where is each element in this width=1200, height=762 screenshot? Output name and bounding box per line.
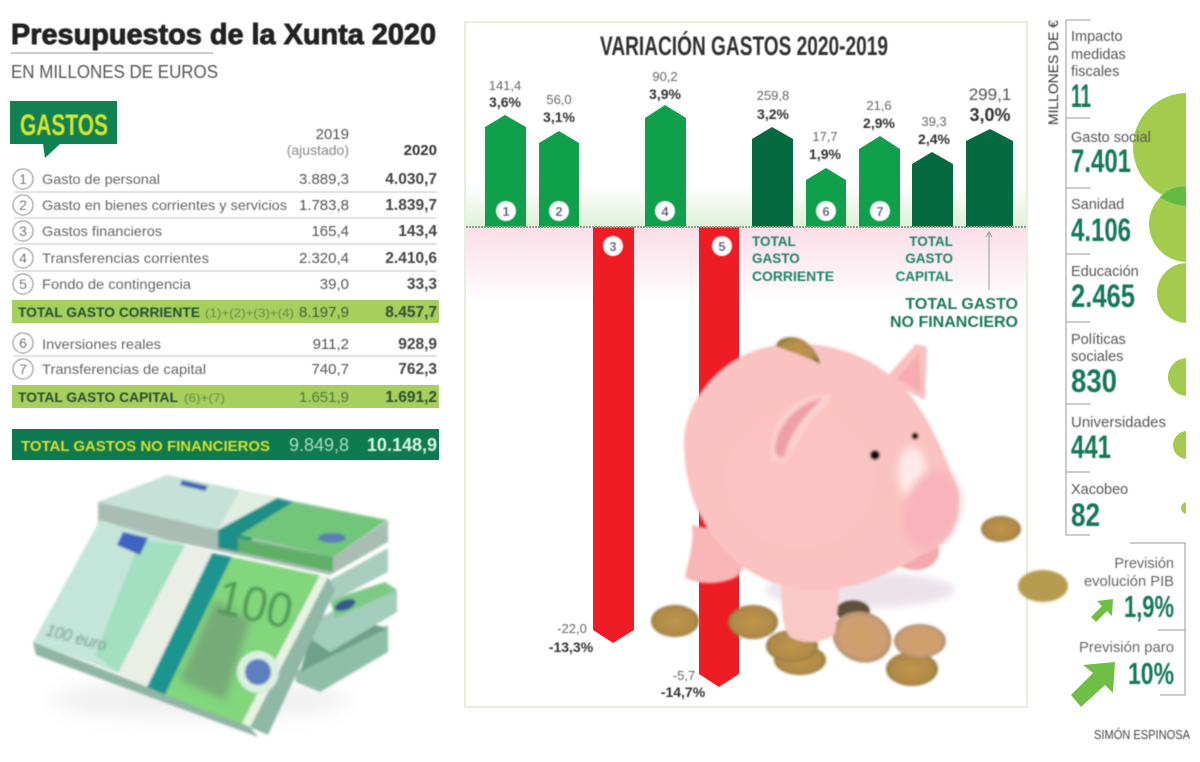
bar number badges: 2	[555, 204, 563, 219]
bar chart: negative variations	[593, 227, 739, 687]
bar value labels: 3,6%	[489, 94, 522, 110]
unemployment forecast	[1079, 640, 1174, 691]
column headers: 2020	[404, 142, 437, 159]
bar number badges	[496, 201, 890, 256]
table rows: current spending	[13, 169, 437, 294]
table rows: capital spending	[13, 333, 437, 379]
label: total gasto no financiero: TOTAL GASTO	[905, 296, 1018, 313]
image: piggy bank with coins	[651, 337, 1068, 686]
table rows: capital spending: 740,7	[311, 361, 349, 378]
unemployment forecast: 10%	[1128, 656, 1174, 691]
GDP forecast: 1,9%	[1124, 589, 1174, 624]
figure values	[1071, 78, 1135, 533]
panel: expenses table	[10, 101, 439, 460]
table rows: current spending: 2	[19, 197, 27, 213]
figure values: 82	[1071, 497, 1100, 533]
table rows: current spending: 2.320,4	[299, 250, 349, 267]
subtitle: EN MILLONES DE EUROS	[11, 62, 218, 82]
table rows: current spending: Transferencias corrientes	[42, 250, 209, 266]
credit: SIMÓN ESPINOSA	[1094, 727, 1191, 742]
bar value labels: -14,7%	[661, 684, 706, 700]
panel: expense variation chart	[465, 22, 1027, 707]
GDP forecast	[1084, 556, 1174, 624]
bar value labels: 17,7	[812, 129, 838, 144]
figure values: 441	[1071, 429, 1111, 465]
total capital spending row: 1.651,9	[299, 389, 349, 406]
GDP forecast: evolución PIB	[1084, 574, 1174, 590]
label: total gasto capital: TOTAL	[909, 234, 953, 249]
table rows: current spending: 3	[19, 223, 27, 239]
coin in slot	[776, 337, 820, 364]
figure values: 4.106	[1071, 212, 1131, 248]
table rows: current spending: Gastos financieros	[42, 223, 162, 239]
figure labels: Impacto	[1071, 29, 1123, 45]
table rows: current spending: Fondo de contingencia	[42, 276, 191, 292]
total current spending row: (1)+(2)+(3)+(4)	[205, 306, 294, 320]
grand total row	[12, 429, 439, 460]
grand total row: TOTAL GASTOS NO FINANCIEROS	[21, 438, 270, 455]
label: total gasto capital: CAPITAL	[896, 269, 953, 284]
figure values: 11	[1071, 78, 1091, 114]
bar value labels: 3,0%	[969, 105, 1011, 125]
figure values: 7.401	[1071, 143, 1131, 179]
chart title: VARIACIÓN GASTOS 2020-2019	[600, 30, 888, 61]
table rows: current spending: 1.839,7	[385, 197, 437, 214]
total current spending row: TOTAL GASTO CORRIENTE	[18, 305, 200, 320]
table rows: current spending: 1	[19, 171, 27, 187]
table rows: current spending: Gasto en bienes corrientes y servicios	[42, 197, 287, 213]
bar number badges: 5	[718, 239, 726, 254]
column headers: 2019	[316, 126, 349, 143]
panel: impact figures in millions	[1048, 20, 1186, 536]
bar value labels: 299,1	[969, 85, 1011, 104]
bar value labels: 90,2	[652, 69, 678, 84]
panel: GDP and unemployment forecast	[1071, 543, 1185, 707]
table rows: current spending: 4	[19, 250, 27, 266]
table rows: current spending: 39,0	[320, 276, 349, 293]
table rows: capital spending: 762,3	[398, 361, 437, 378]
figure values: 830	[1071, 363, 1117, 399]
bar value labels: -5,7	[673, 668, 695, 683]
grand total row: 10.148,9	[367, 435, 437, 455]
bar value labels: 21,6	[866, 98, 892, 113]
proportional circles	[1133, 93, 1186, 514]
figure labels: Sanidad	[1071, 197, 1124, 213]
bar value labels: 3,9%	[649, 86, 682, 102]
label: total gasto corriente: GASTO	[752, 251, 800, 266]
arrow: pointer to total bar	[986, 232, 992, 290]
figure labels: medidas	[1071, 47, 1126, 63]
table rows: current spending: 3.889,3	[299, 171, 349, 188]
label: total gasto no financiero	[890, 296, 1018, 331]
table rows: capital spending: 6	[19, 335, 27, 351]
total current spending row: 8.197,9	[299, 304, 349, 321]
table rows: capital spending: 928,9	[398, 336, 437, 353]
bar value labels: -22,0	[557, 621, 587, 636]
label: total gasto corriente: CORRIENTE	[752, 269, 834, 284]
table rows: current spending: Gasto de personal	[42, 171, 160, 187]
bar number badges: 6	[822, 204, 830, 219]
bar number badges: 3	[609, 239, 617, 254]
figure labels: Gasto social	[1071, 130, 1151, 146]
bar value labels: 3,2%	[757, 106, 790, 122]
table rows: current spending: 4.030,7	[385, 171, 437, 188]
bar number badges: 4	[661, 204, 669, 219]
heading: gastos tag: GASTOS	[20, 109, 108, 142]
label: total gasto no financiero: NO FINANCIERO	[890, 314, 1018, 331]
table rows: current spending: 2.410,6	[385, 250, 437, 267]
table rows: capital spending: Inversiones reales	[42, 336, 161, 352]
total current spending row	[12, 300, 439, 323]
arrow: GDP up	[1091, 599, 1113, 622]
figure labels: sociales	[1071, 349, 1123, 365]
bar chart: positive variations	[485, 105, 1013, 227]
figure labels: fiscales	[1071, 64, 1119, 80]
column headers: (ajustado)	[287, 142, 349, 158]
figure labels: Políticas	[1071, 332, 1126, 348]
table rows: current spending: 1.783,8	[299, 197, 349, 214]
figure labels: Educación	[1071, 264, 1139, 280]
label: total gasto corriente	[752, 234, 834, 284]
bar number badges: 7	[876, 204, 884, 219]
bar value labels: 1,9%	[809, 146, 842, 162]
table rows: current spending: 165,4	[311, 223, 349, 240]
bar value labels: 259,8	[757, 88, 789, 103]
image: stacks of euro banknotes	[33, 475, 397, 737]
title: Presupuestos de la Xunta 2020	[11, 19, 436, 51]
figure labels	[1071, 29, 1166, 498]
grand total row: 9.849,8	[289, 435, 349, 455]
arrow: unemployment	[1071, 662, 1115, 707]
bar value labels: 2,4%	[918, 131, 951, 147]
table rows: current spending: 33,3	[407, 276, 437, 293]
bar value labels: 141,4	[489, 78, 521, 93]
label: total gasto corriente: TOTAL	[752, 234, 796, 249]
table rows: current spending: 5	[19, 276, 27, 292]
image: stacks of euro banknotes: 100 euro	[44, 621, 109, 655]
total capital spending row: (6)+(7)	[184, 391, 225, 405]
unemployment forecast: Previsión paro	[1079, 640, 1174, 656]
label: total gasto capital	[896, 234, 953, 284]
bar value labels	[489, 69, 1011, 700]
total current spending row: 8.457,7	[385, 304, 437, 321]
bar value labels: 56,0	[546, 92, 572, 107]
total capital spending row	[12, 385, 439, 408]
bar number badges: 1	[502, 204, 510, 219]
heading: gastos tag	[10, 101, 117, 158]
figure values: 2.465	[1071, 278, 1135, 314]
table rows: capital spending: 7	[19, 361, 27, 377]
rotated unit label: MILLONES DE €	[1045, 20, 1061, 125]
bar value labels: 2,9%	[863, 115, 896, 131]
image: stacks of euro banknotes: 100	[211, 570, 298, 640]
column headers	[287, 126, 437, 159]
bar value labels: -13,3%	[549, 639, 594, 655]
coins around pig	[651, 516, 1068, 686]
total capital spending row: TOTAL GASTO CAPITAL	[18, 390, 178, 405]
table rows: capital spending: 911,2	[313, 336, 349, 353]
bar value labels: 3,1%	[543, 109, 576, 125]
total capital spending row: 1.691,2	[385, 389, 437, 406]
bar value labels: 39,3	[921, 114, 947, 129]
label: total gasto capital: GASTO	[905, 251, 953, 266]
GDP forecast: Previsión	[1114, 556, 1174, 572]
table rows: capital spending: Transferencias de capital	[42, 361, 206, 377]
figure labels: Universidades	[1071, 415, 1166, 431]
figure labels: Xacobeo	[1071, 482, 1128, 498]
table rows: current spending: 143,4	[398, 223, 437, 240]
pig body	[684, 344, 969, 642]
